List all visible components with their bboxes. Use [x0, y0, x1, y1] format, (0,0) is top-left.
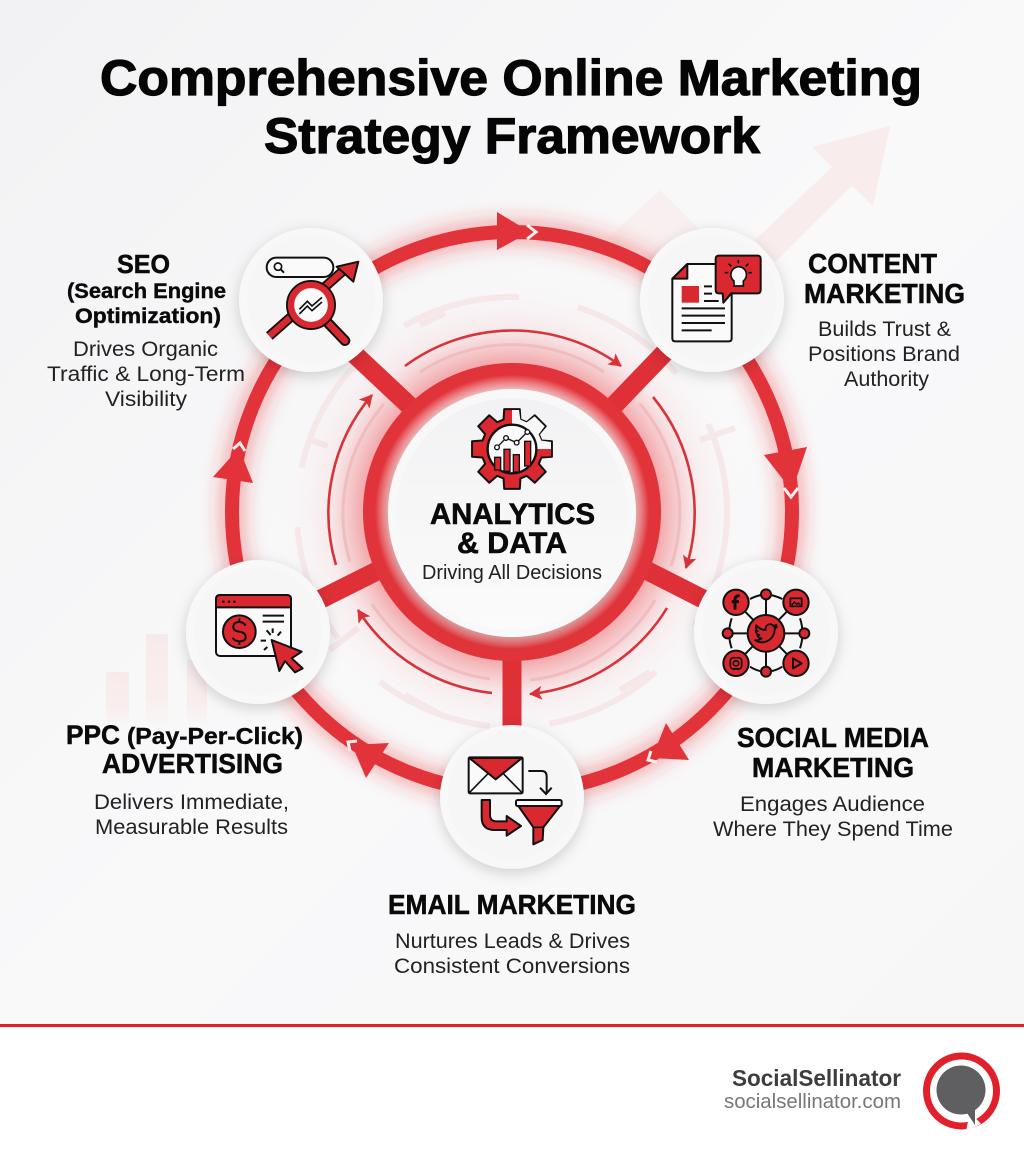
arrow: PPC to SEO	[213, 443, 253, 483]
label: content marketing: CONTENT	[808, 248, 937, 279]
label: SEO: Drives Organic	[73, 338, 218, 361]
label: email marketing: Consistent Conversions	[394, 955, 630, 978]
label: SEO	[47, 249, 245, 411]
spokes	[315, 345, 705, 735]
center label	[422, 498, 602, 584]
label: email marketing	[388, 889, 636, 978]
label: PPC advertising	[66, 720, 303, 839]
icon: email funnel	[469, 757, 562, 844]
node: PPC	[186, 560, 330, 704]
label: PPC advertising: ADVERTISING	[102, 748, 283, 779]
background growth arrow	[600, 126, 890, 275]
label: SEO: Visibility	[105, 388, 188, 411]
center hub	[363, 363, 661, 661]
footer brand text: SocialSellinator	[732, 1065, 901, 1091]
icon: analytics gear	[472, 409, 552, 489]
ring glow	[232, 232, 792, 792]
node: content marketing	[640, 228, 784, 372]
outer cycle ring	[232, 232, 792, 792]
footer	[0, 1024, 1024, 1154]
logo	[926, 1056, 996, 1131]
label: social media marketing: MARKETING	[752, 752, 914, 783]
inner faint pattern	[297, 297, 735, 727]
label: content marketing: Positions Brand	[808, 343, 960, 366]
label: SEO: Traffic & Long-Term	[47, 363, 245, 386]
label: content marketing: Authority	[844, 368, 930, 391]
label: PPC advertising: Delivers Immediate,	[94, 791, 289, 814]
thin inner cycle arrows	[328, 330, 695, 694]
label: PPC advertising: Measurable Results	[95, 816, 288, 839]
label: SEO: SEO	[117, 249, 170, 279]
label: email marketing: EMAIL MARKETING	[388, 889, 636, 920]
label: social media marketing: Engages Audience	[740, 793, 925, 816]
footer brand text	[724, 1065, 901, 1113]
pale inner arcs	[343, 345, 680, 680]
title: Strategy Framework	[264, 108, 760, 164]
label: email marketing: Nurtures Leads & Drives	[395, 930, 630, 953]
center label: Driving All Decisions	[422, 562, 602, 584]
arrow: social to email	[648, 723, 689, 762]
background bars	[106, 634, 207, 724]
label: social media marketing	[713, 722, 953, 841]
icon: social network	[723, 589, 809, 677]
node: SEO	[239, 228, 383, 372]
center label: ANALYTICS	[430, 498, 595, 531]
footer brand text: socialsellinator.com	[724, 1091, 901, 1113]
label: social media marketing: Where They Spend Time	[713, 818, 953, 841]
center label: & DATA	[457, 527, 567, 560]
node: social media	[694, 560, 838, 704]
label: SEO: Optimization)	[75, 305, 221, 328]
label: content marketing	[804, 248, 965, 391]
label: PPC advertising: (Pay-Per-Click)	[127, 723, 303, 749]
label: PPC advertising: PPC	[66, 720, 120, 750]
label: content marketing: MARKETING	[804, 278, 965, 309]
node: email marketing	[440, 725, 584, 869]
icon: PPC browser and cursor	[216, 595, 303, 672]
title: Comprehensive Online Marketing	[100, 50, 922, 106]
label: SEO: (Search Engine	[67, 280, 226, 303]
icon: SEO search and growth	[267, 258, 358, 341]
label: content marketing: Builds Trust &	[818, 318, 951, 341]
label: social media marketing: SOCIAL MEDIA	[737, 722, 929, 753]
title	[100, 50, 922, 164]
center glow	[277, 277, 747, 747]
arrow: content to social	[764, 447, 807, 497]
arrow: email to PPC	[348, 741, 389, 778]
icon: document and idea bubble	[672, 256, 761, 341]
arrow: SEO to content	[497, 212, 536, 250]
